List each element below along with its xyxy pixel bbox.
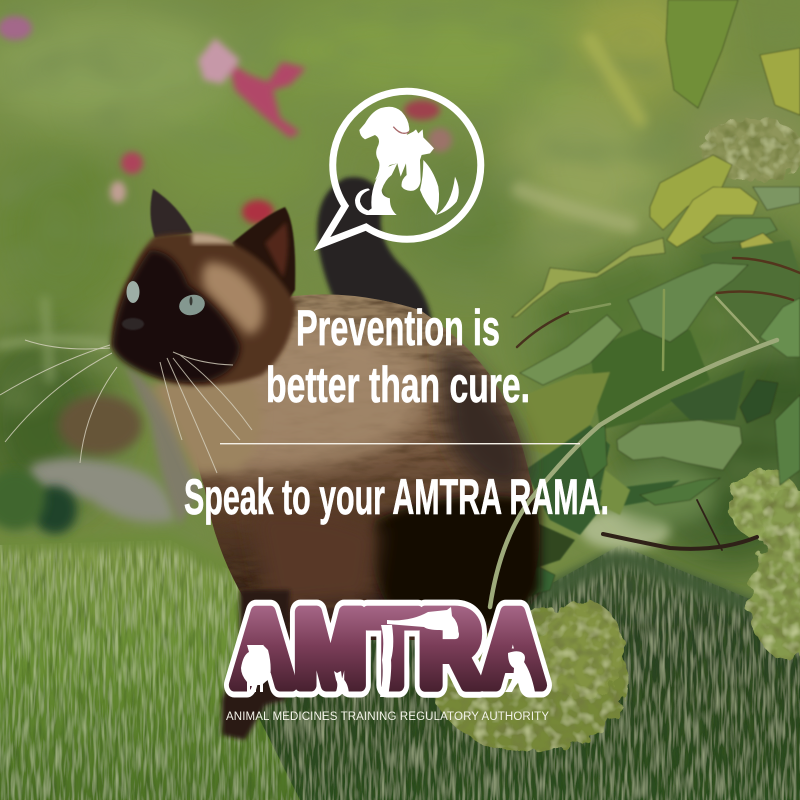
head	[112, 233, 296, 386]
whiskers	[0, 340, 252, 473]
flowers	[0, 16, 452, 224]
bubble outline	[322, 91, 481, 244]
dark belly	[371, 496, 540, 625]
headline: prevention is better than cure: better than cure.	[266, 357, 530, 413]
icon: horse	[380, 607, 458, 697]
logo: AMTRA: AMTRA	[232, 590, 544, 708]
wordmark: AMTRA	[232, 590, 544, 708]
headline: prevention is better than cure	[266, 300, 530, 413]
ear right	[232, 207, 295, 320]
grass right	[250, 545, 800, 800]
leaves	[512, 0, 800, 597]
logo strapline: ANIMAL MEDICINES TRAINING REGULATORY AUTHORITY	[226, 711, 549, 723]
icon: speech bubble with dog, cat and rabbit	[322, 91, 481, 244]
rear leg shadow	[222, 590, 290, 740]
icon: dog	[505, 651, 535, 692]
photo: Siamese cat	[0, 177, 540, 740]
icon: cat	[334, 671, 349, 694]
dog cat rabbit silhouette	[355, 107, 459, 215]
eyes	[126, 281, 140, 303]
grass left	[0, 540, 300, 800]
blurred stone and animal	[28, 458, 175, 522]
hydrangeas	[432, 118, 800, 752]
body	[194, 294, 540, 640]
blurred leaf streaks	[0, 40, 640, 380]
icon: sheep	[241, 645, 271, 692]
ear left	[150, 189, 193, 238]
dark mask	[112, 250, 240, 382]
headline: prevention is better than cure: Prevention is	[296, 300, 500, 356]
dark tail behind	[317, 177, 432, 330]
forehead tan	[202, 262, 263, 335]
light chest and flank	[206, 320, 425, 472]
darker right flank	[440, 340, 527, 490]
grey chest fringe	[125, 365, 200, 525]
foreground stem over cat	[490, 340, 777, 607]
blurred pale patch behind twig	[580, 510, 670, 550]
stems and twigs	[517, 258, 800, 550]
blurred texture blotches	[0, 0, 800, 560]
nose	[122, 318, 144, 330]
soft grass edges	[0, 540, 800, 625]
